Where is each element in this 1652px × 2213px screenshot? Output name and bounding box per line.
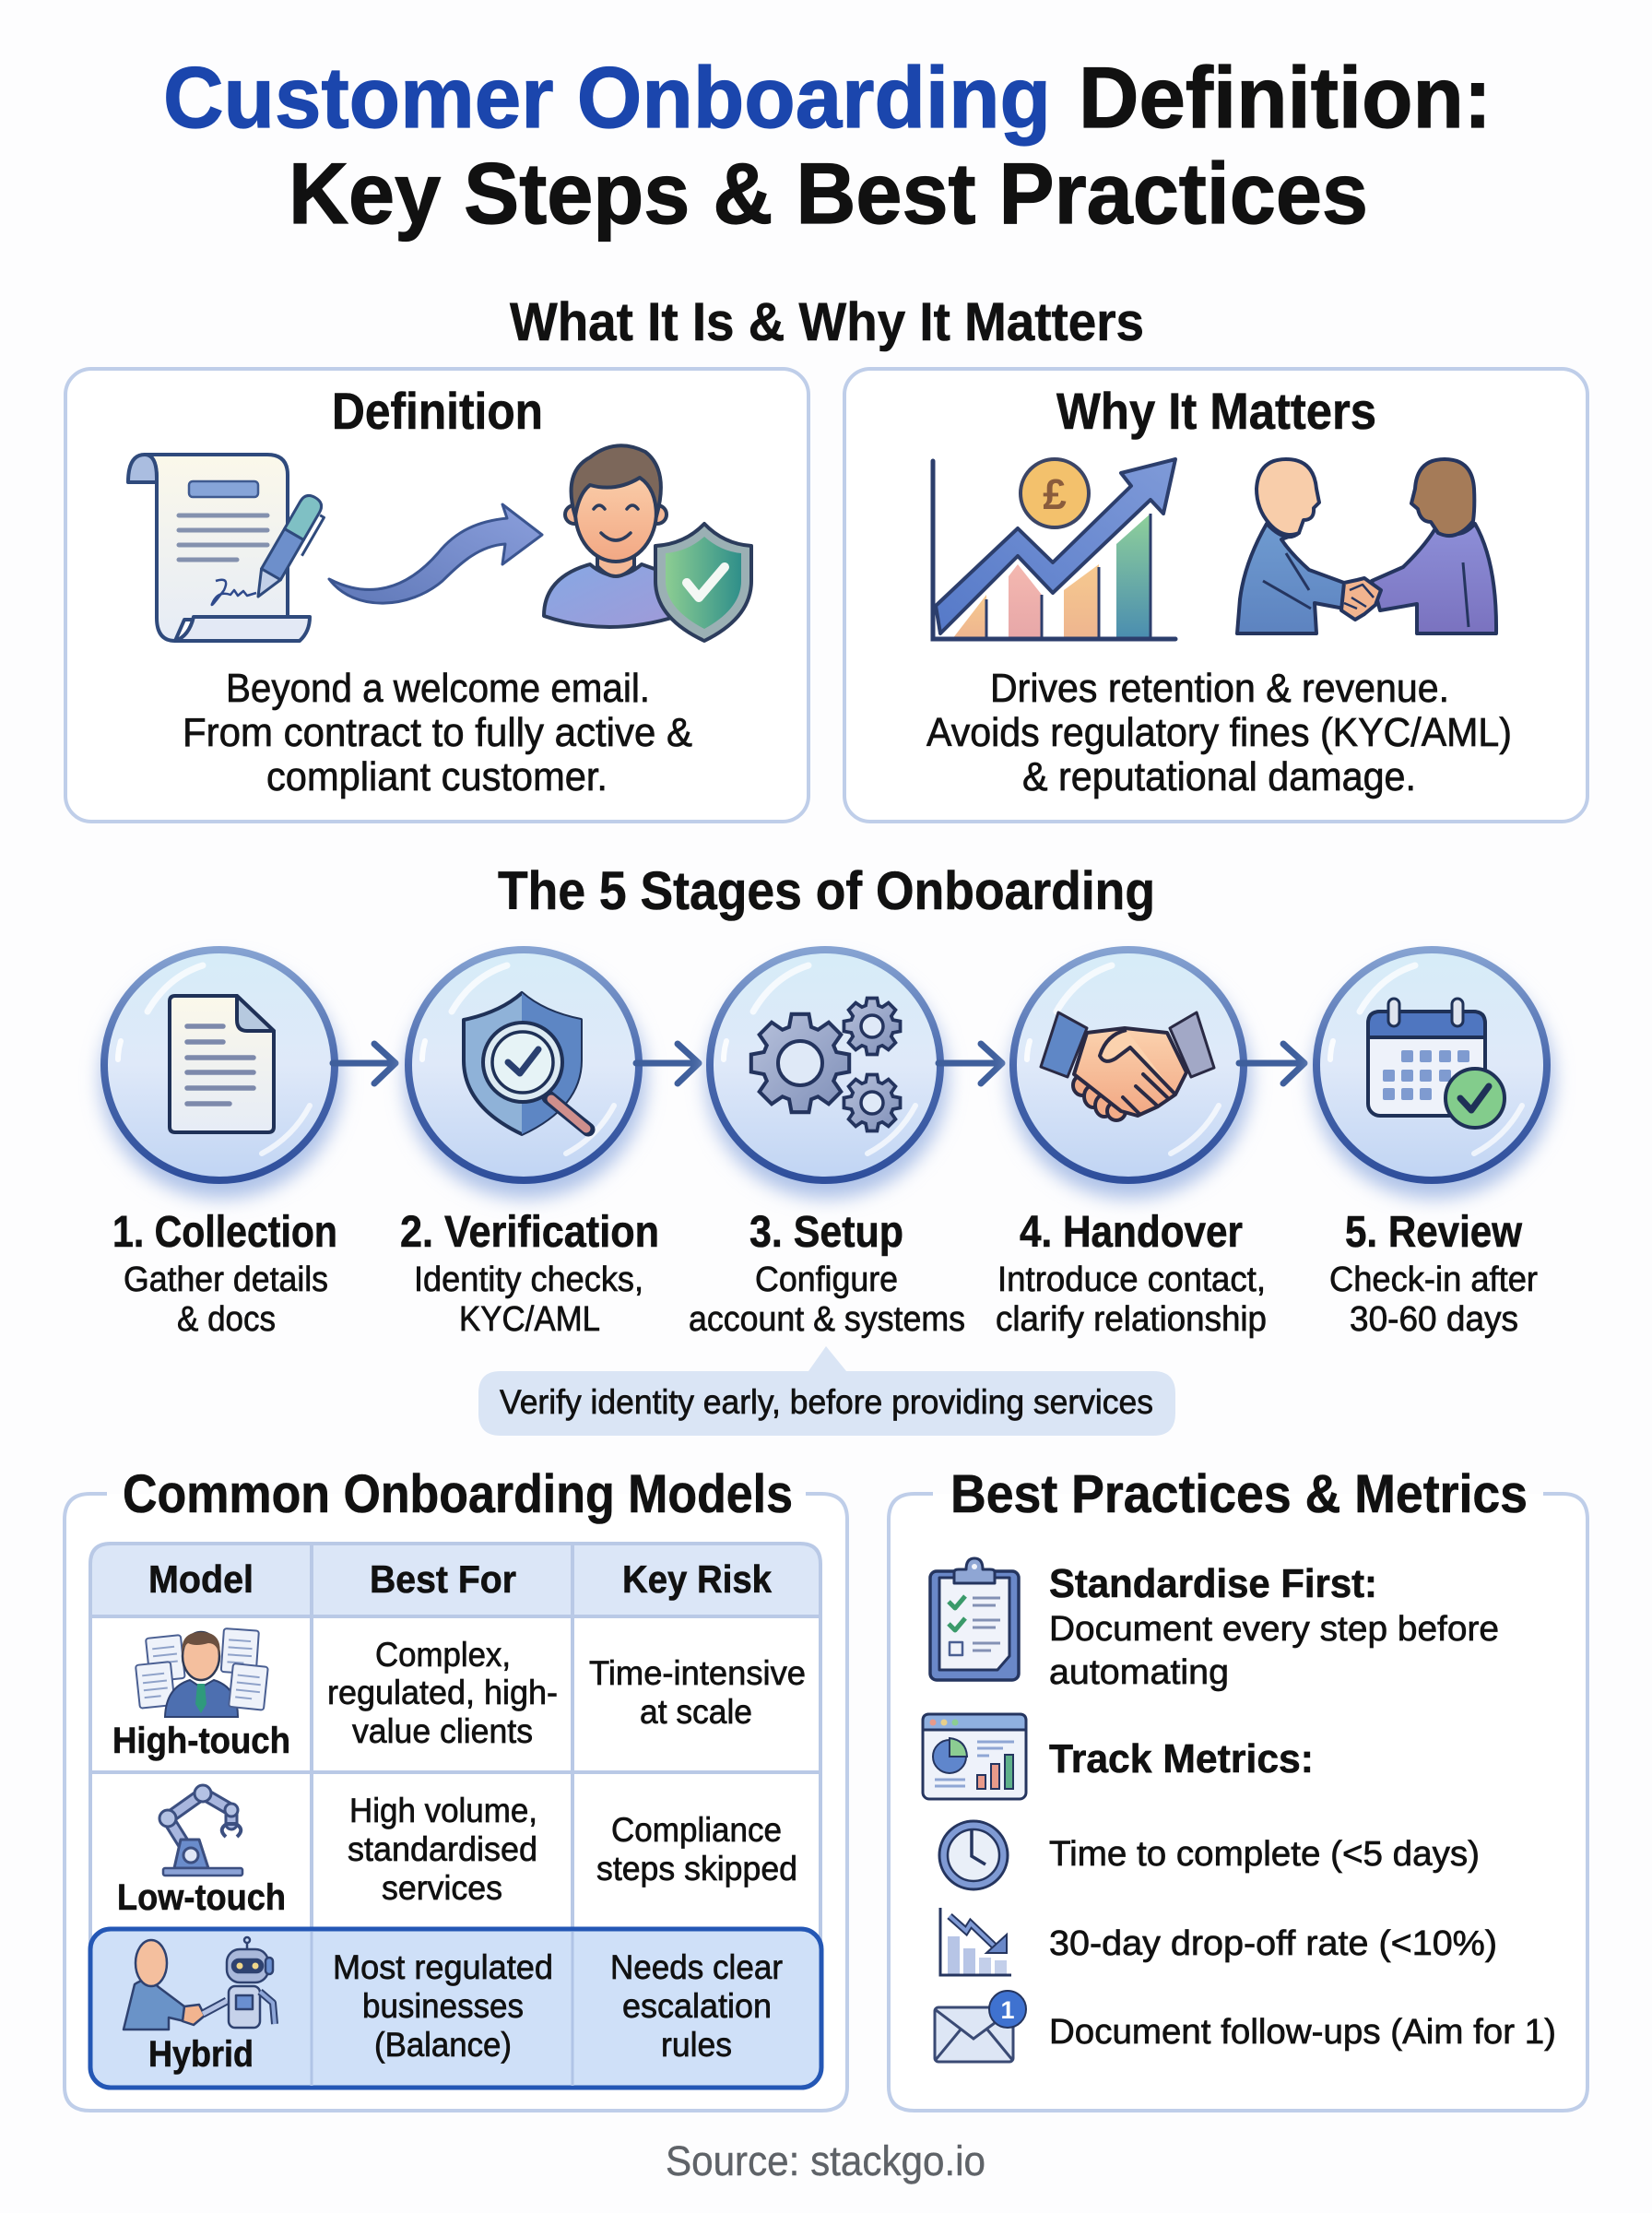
panel heading: definition: Definition: [332, 382, 543, 440]
row: high-touch: Complex,: [375, 1636, 511, 1674]
stage 4 label: clarify relationship: [996, 1300, 1267, 1339]
row: low-touch: Low-touch: [117, 1877, 286, 1918]
heading: common onboarding models: Common Onboarding Models: [123, 1464, 793, 1524]
why it matters text: Avoids regulatory fines (KYC/AML): [926, 710, 1512, 755]
row: low-touch: [117, 1785, 797, 1918]
stage 3 label: 3. Setup: [749, 1208, 903, 1257]
stage 5 label: 5. Review: [1345, 1208, 1523, 1257]
row: high-touch: [112, 1628, 806, 1761]
stage 1 label: 1. Collection: [112, 1208, 337, 1257]
why it matters text: & reputational damage.: [1022, 754, 1416, 799]
why it matters text: Drives retention & revenue.: [990, 666, 1449, 711]
icon: email with badge: [935, 1991, 1026, 2062]
title: Customer Onboarding: [163, 49, 1051, 146]
arrow: stage 4 to 5: [1239, 1044, 1304, 1083]
table header row: Key Risk: [622, 1557, 773, 1601]
icon: clipboard checklist: [930, 1558, 1019, 1680]
panel: why it matters: [844, 369, 1587, 822]
icon: clock: [939, 1821, 1008, 1889]
stage 4 label: 4. Handover: [1020, 1208, 1243, 1257]
stage 5 label: 30-60 days: [1350, 1300, 1518, 1339]
heading: best practices and metrics: Best Practices & Metrics: [950, 1464, 1528, 1524]
stage 3 label: Configure: [755, 1260, 898, 1299]
row: low-touch: steps skipped: [596, 1850, 797, 1888]
item: standardise first: Standardise First:: [1049, 1561, 1377, 1606]
row: low-touch: High volume,: [349, 1792, 537, 1829]
icon: shield and magnifier: [464, 993, 588, 1134]
source: Source: stackgo.io: [666, 2137, 985, 2184]
stage 3: setup: [689, 950, 965, 1339]
stage 3 label: account & systems: [689, 1300, 965, 1339]
arrow: stage 2 to 3: [636, 1044, 699, 1083]
metric: drop-off rate: 30-day drop-off rate (<10%): [1049, 1924, 1497, 1963]
stage 2: verification: [400, 950, 659, 1339]
arrow: contract to customer: [329, 504, 542, 603]
row: low-touch: standardised: [348, 1830, 537, 1868]
arrow: stage 1 to 2: [333, 1044, 395, 1083]
stage 4: handover: [996, 950, 1267, 1339]
row: hybrid (highlighted): rules: [661, 2026, 732, 2064]
chart: rising revenue: £: [1043, 470, 1067, 518]
why it matters text: [926, 666, 1512, 799]
definition text: Beyond a welcome email.: [226, 666, 650, 711]
metric: drop-off rate: [940, 1908, 1497, 1975]
stage 4 label: Introduce contact,: [997, 1260, 1266, 1299]
arrow: stage 3 to 4: [938, 1044, 1002, 1083]
icon: handshake: [1041, 1012, 1214, 1120]
row: hybrid (highlighted): (Balance): [374, 2026, 512, 2064]
stage 3 label: [689, 1208, 965, 1339]
icon: consultant with documents: [136, 1628, 268, 1717]
stage 2 label: [400, 1208, 659, 1339]
row: high-touch: value clients: [352, 1712, 533, 1750]
callout: verify identity early: Verify identity early, before providing services: [500, 1383, 1153, 1421]
stage 2 label: KYC/AML: [459, 1300, 600, 1339]
icon: dashboard: [923, 1714, 1026, 1799]
title: Key Steps & Best Practices: [289, 145, 1368, 242]
icon: document: [170, 996, 274, 1132]
definition text: From contract to fully active &: [183, 710, 692, 755]
item: standardise first: [930, 1558, 1499, 1692]
item: track metrics: [923, 1714, 1314, 1799]
metric: time to complete: Time to complete (<5 days): [1049, 1835, 1480, 1874]
panel: common onboarding models: [65, 1464, 847, 2111]
panel: definition: [65, 369, 808, 822]
table: [90, 1544, 821, 2088]
icon: email with badge: 1: [1000, 1996, 1015, 2024]
item: track metrics: Track Metrics:: [1049, 1736, 1314, 1781]
panel: best practices and metrics: [889, 1464, 1587, 2111]
icon: happy customer with shield: [544, 445, 751, 641]
row: hybrid (highlighted): escalation: [622, 1987, 772, 2025]
metric: time to complete: [939, 1821, 1480, 1889]
icon: calendar with check: [1368, 999, 1504, 1128]
row: hybrid (highlighted): Needs clear: [610, 1948, 783, 1986]
title: Definition:: [1079, 49, 1492, 146]
stage 1 label: Gather details: [124, 1260, 328, 1299]
stage 5 label: [1329, 1208, 1538, 1339]
definition text: compliant customer.: [266, 754, 608, 799]
title: [163, 49, 1492, 242]
panel heading: why it matters: Why It Matters: [1056, 382, 1376, 440]
table header row: Model: [148, 1557, 254, 1601]
stage 1: collection: [100, 950, 342, 1339]
stage 1 label: & docs: [177, 1300, 276, 1339]
row: high-touch: at scale: [640, 1693, 752, 1731]
row: high-touch: regulated, high-: [327, 1674, 558, 1711]
icon: person shaking hands with robot: [124, 1937, 275, 2030]
icon: handshake between two people: [1237, 459, 1496, 633]
item: standardise first: automating: [1049, 1653, 1229, 1692]
icon: signed contract scroll: [128, 455, 330, 641]
table header row: [148, 1557, 773, 1601]
table header row: Best For: [370, 1557, 516, 1601]
row: hybrid (highlighted): businesses: [362, 1987, 524, 2025]
stage 5 label: Check-in after: [1329, 1260, 1538, 1299]
definition text: [183, 666, 692, 799]
heading: five stages: The 5 Stages of Onboarding: [498, 861, 1155, 921]
chart: rising revenue: [933, 459, 1175, 639]
metric: document follow-ups: Document follow-ups (Aim for 1): [1049, 2013, 1556, 2052]
row: hybrid (highlighted): Hybrid: [148, 2034, 254, 2075]
icon: falling chart: [940, 1908, 1011, 1975]
icon: robot arm: [159, 1785, 242, 1876]
icon: gears: [751, 998, 901, 1131]
stage 2 label: 2. Verification: [400, 1208, 659, 1257]
stage 5: review: [1313, 950, 1554, 1339]
row: high-touch: High-touch: [112, 1721, 290, 1761]
row: low-touch: Compliance: [611, 1811, 782, 1849]
row: high-touch: Time-intensive: [589, 1654, 806, 1692]
stage 1 label: [112, 1208, 337, 1339]
item: standardise first: Document every step before: [1049, 1610, 1499, 1649]
stage 2 label: Identity checks,: [414, 1260, 643, 1299]
row: hybrid (highlighted): Most regulated: [333, 1948, 553, 1986]
metric: document follow-ups: [935, 1991, 1556, 2062]
heading: what it is: What It Is & Why It Matters: [510, 292, 1144, 352]
row: hybrid (highlighted): [90, 1929, 821, 2088]
row: low-touch: services: [382, 1869, 502, 1907]
stage 4 label: [996, 1208, 1267, 1339]
callout: verify identity early: [478, 1346, 1175, 1436]
